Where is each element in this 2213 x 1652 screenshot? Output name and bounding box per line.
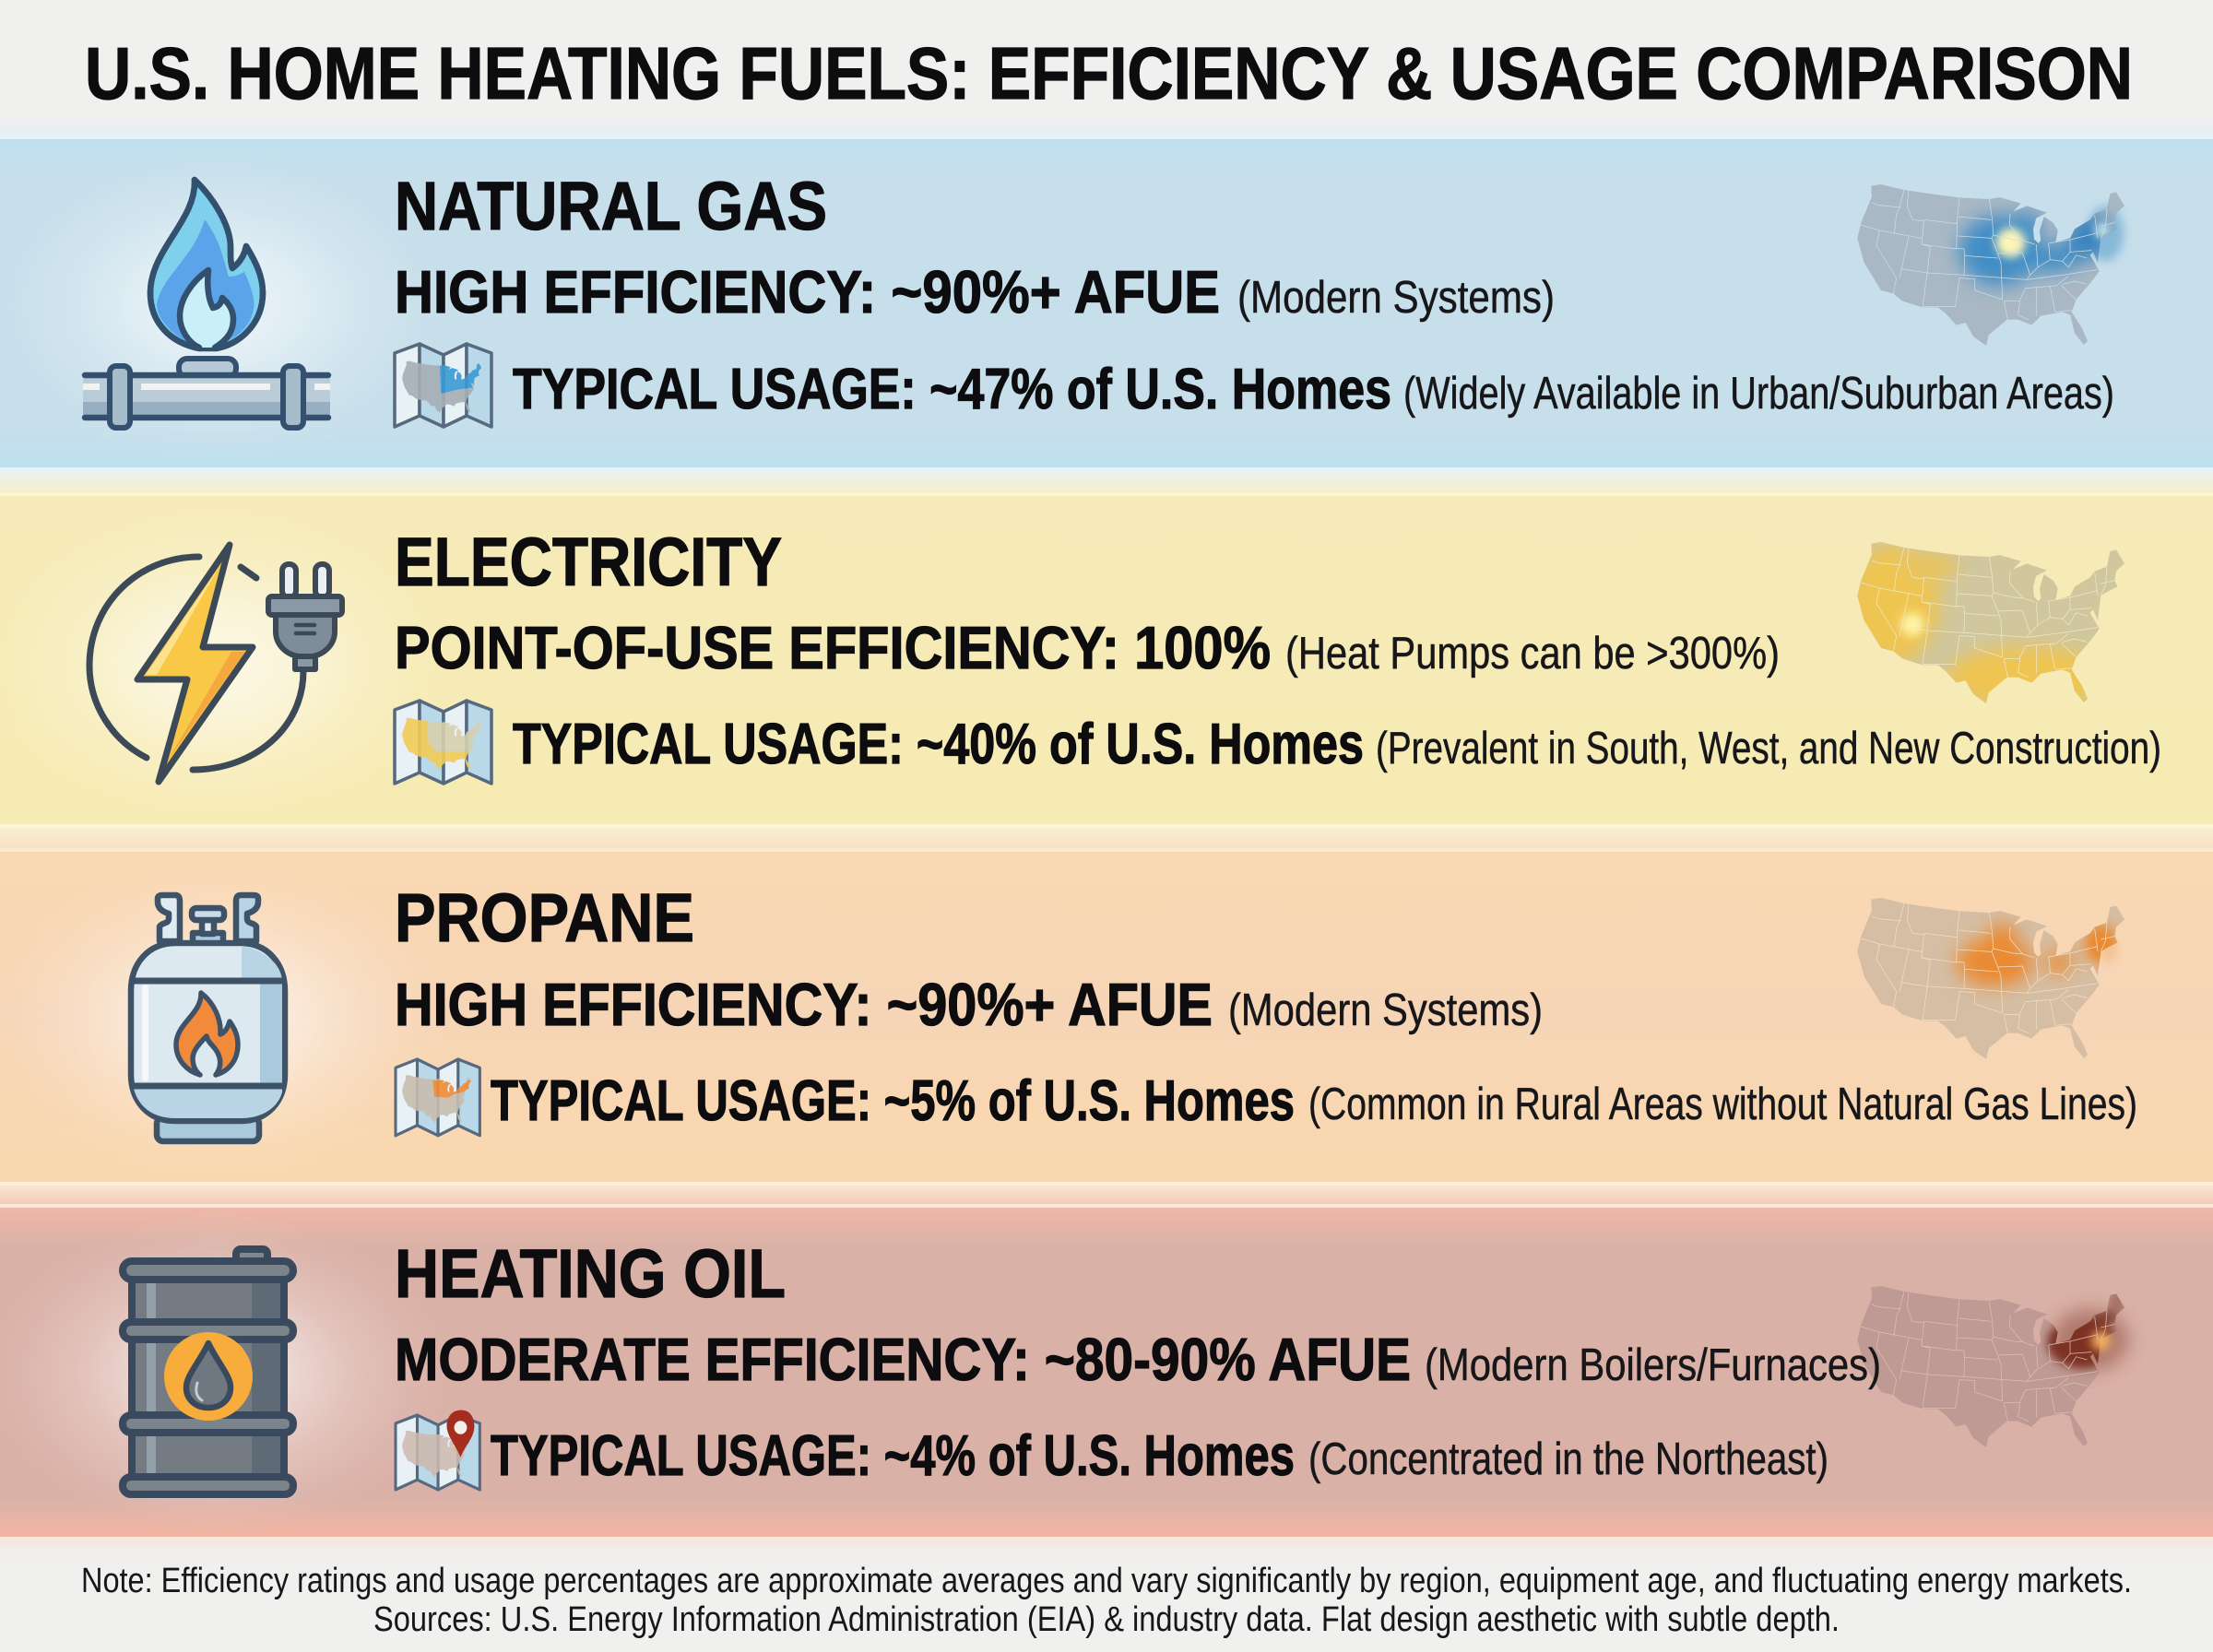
panel: heating oil — [0, 1204, 2213, 1540]
icon: folded map — [396, 1059, 479, 1136]
usage line — [513, 713, 2161, 776]
efficiency line: HIGH EFFICIENCY: ~90%+ AFUE — [395, 971, 1213, 1038]
usage line: TYPICAL USAGE: ~40% of U.S. Homes — [513, 713, 1364, 776]
map: propane regional heat map — [1857, 898, 2124, 1059]
heading: electricity: ELECTRICITY — [395, 524, 782, 600]
icon: gas flame and pipe — [83, 180, 330, 428]
panel: electricity — [0, 492, 2213, 828]
heading: heating oil: HEATING OIL — [395, 1235, 786, 1312]
icon: folded map — [395, 701, 491, 784]
usage line: TYPICAL USAGE: ~5% of U.S. Homes — [491, 1069, 1295, 1133]
panel: natural gas — [0, 136, 2213, 471]
map: natural gas regional heat map — [1857, 184, 2124, 346]
efficiency line: HIGH EFFICIENCY: ~90%+ AFUE — [395, 258, 1220, 325]
efficiency line: (Heat Pumps can be >300%) — [1285, 629, 1780, 678]
efficiency line: POINT-OF-USE EFFICIENCY: 100% — [395, 614, 1271, 681]
usage line — [491, 1069, 2137, 1133]
heading: propane: PROPANE — [395, 879, 694, 956]
icon: oil barrel — [123, 1249, 293, 1494]
efficiency line: (Modern Boilers/Furnaces) — [1425, 1340, 1881, 1390]
usage line: TYPICAL USAGE: ~47% of U.S. Homes — [513, 358, 1391, 421]
efficiency line: (Modern Systems) — [1228, 985, 1543, 1035]
map: heating oil regional heat map — [1857, 1286, 2128, 1447]
icon: propane tank — [131, 895, 285, 1141]
map: electricity regional heat map — [1847, 542, 2124, 708]
footnote — [81, 1562, 2132, 1639]
usage line — [513, 358, 2114, 421]
heading: natural gas: NATURAL GAS — [395, 168, 827, 244]
icon: folded map with pin — [396, 1410, 479, 1490]
usage line: (Concentrated in the Northeast) — [1308, 1434, 1828, 1484]
efficiency line: MODERATE EFFICIENCY: ~80-90% AFUE — [395, 1326, 1411, 1393]
panel: propane — [0, 848, 2213, 1186]
icon: folded map — [395, 344, 491, 427]
icon: lightning bolt and plug — [89, 545, 342, 782]
efficiency line: (Modern Systems) — [1237, 273, 1555, 323]
footnote: Sources: U.S. Energy Information Administration (EIA) & industry data. Flat design aesthetic with subtle depth. — [373, 1600, 1840, 1639]
usage line: TYPICAL USAGE: ~4% of U.S. Homes — [491, 1424, 1295, 1488]
